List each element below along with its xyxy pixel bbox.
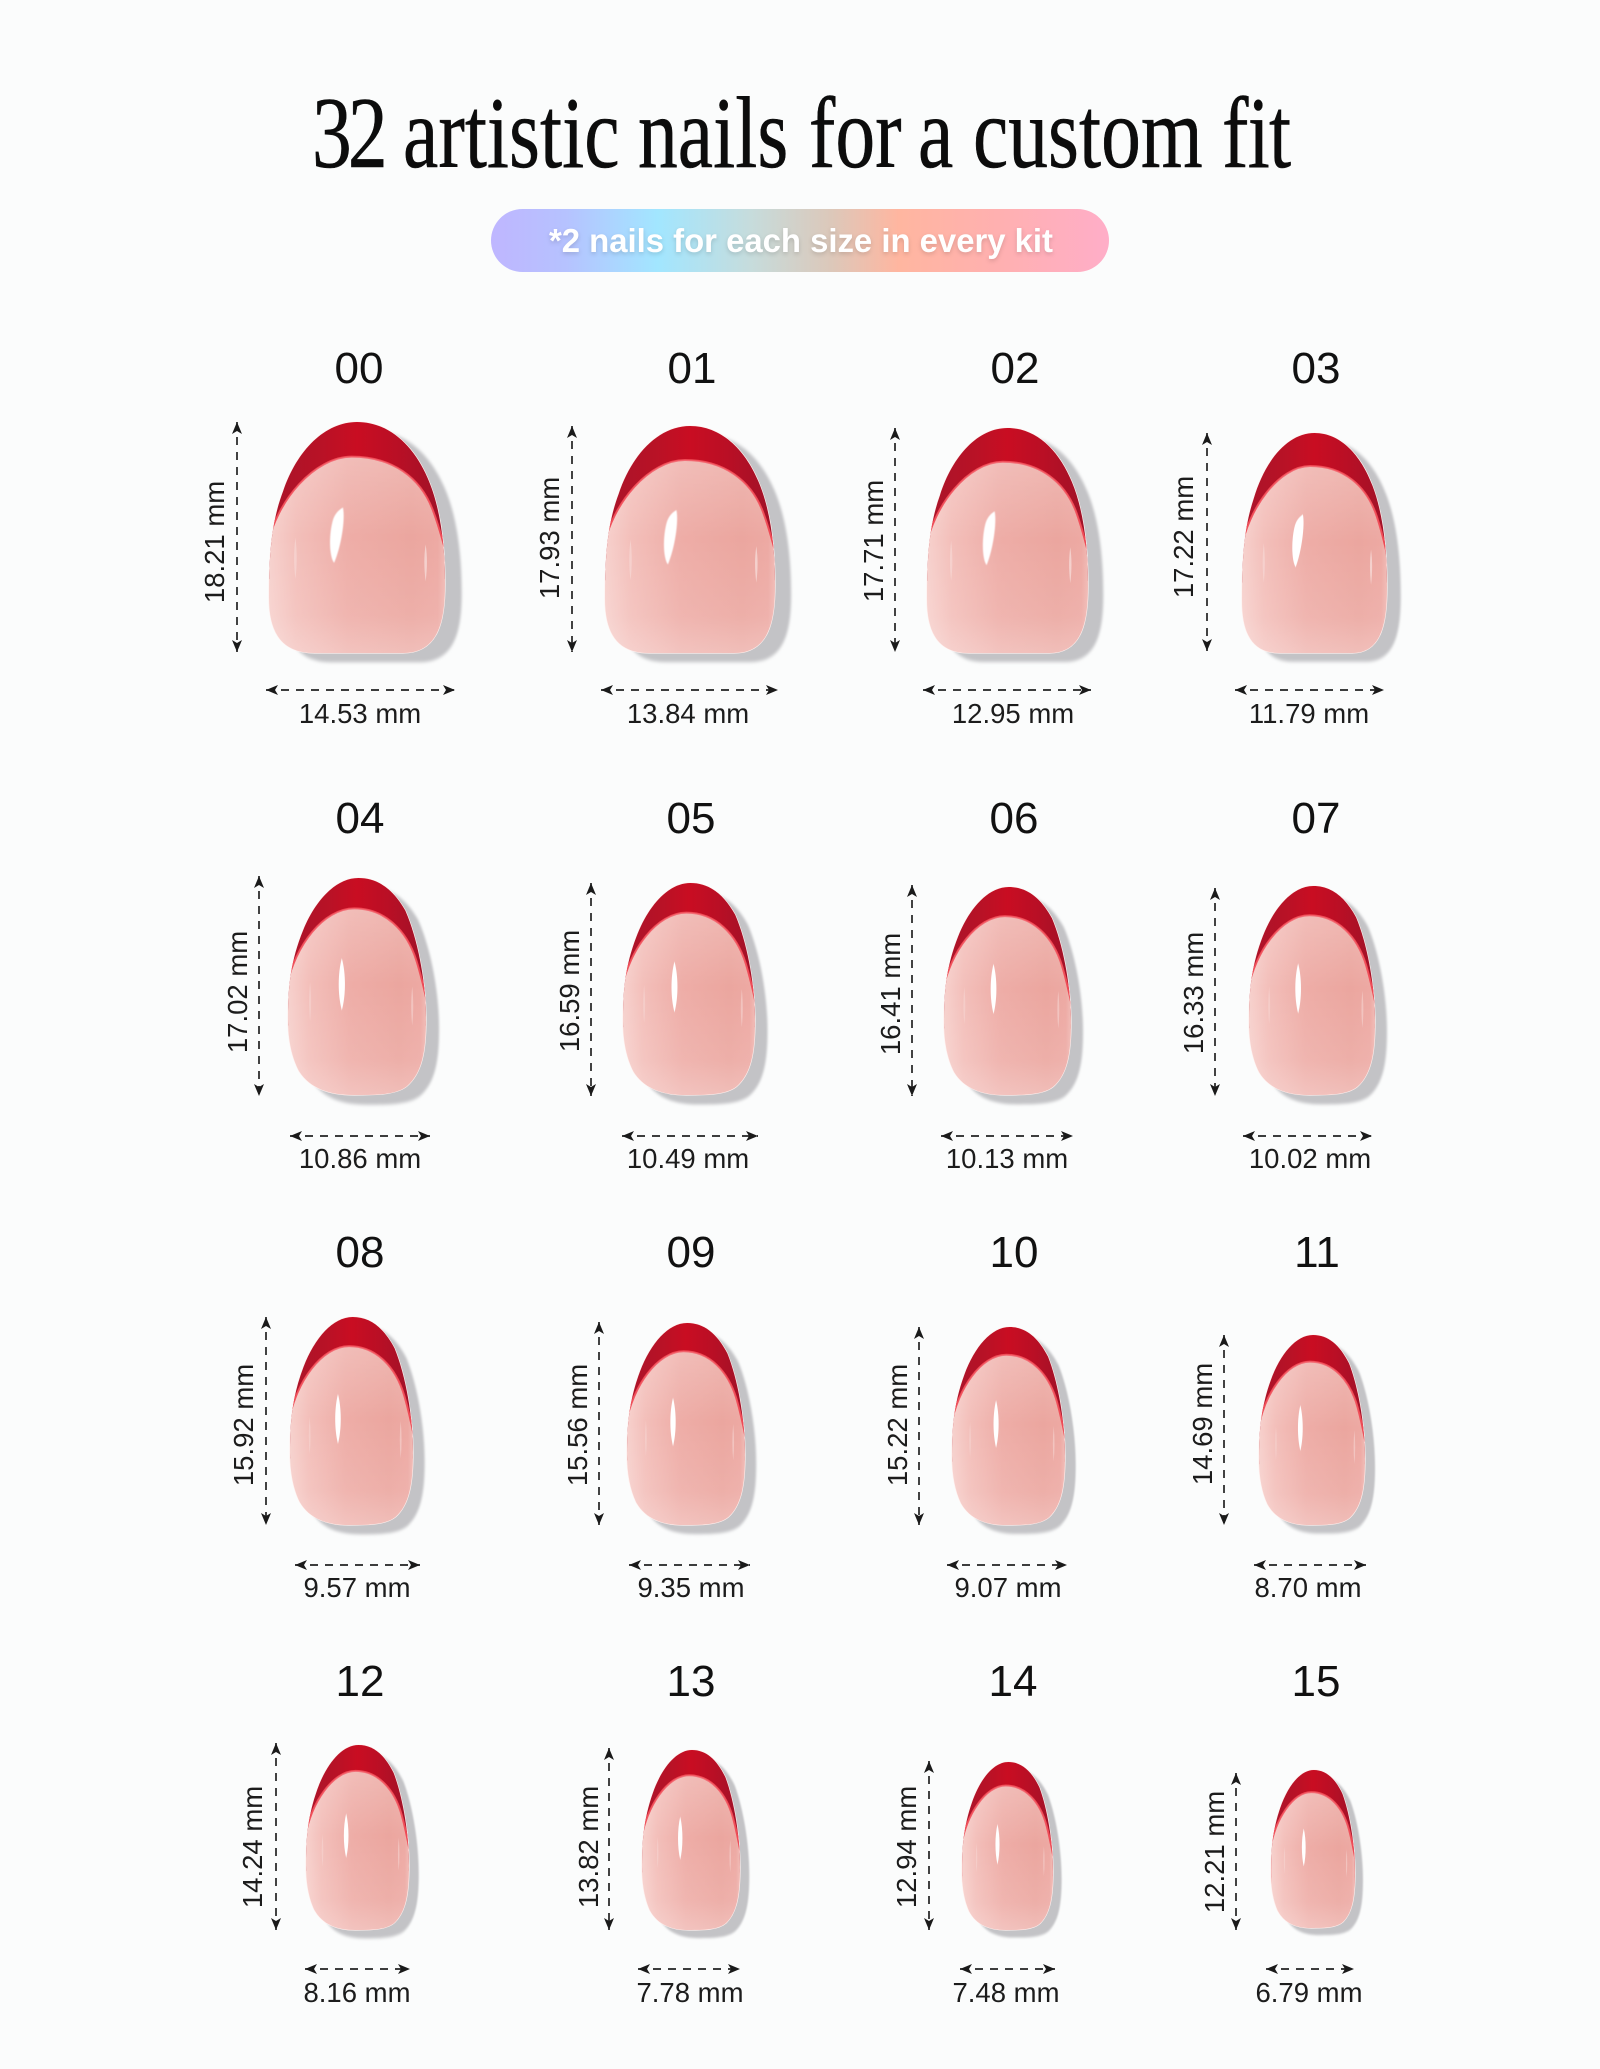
width arrow 08 bbox=[295, 1564, 420, 1566]
width label 14: 7.48 mm bbox=[953, 1977, 1059, 2008]
width label 05: 10.49 mm bbox=[627, 1143, 749, 1174]
width label 13: 7.78 mm bbox=[637, 1977, 743, 2008]
width arrow 02 bbox=[923, 689, 1091, 691]
width arrow 12 bbox=[305, 1968, 410, 1970]
size 09 bbox=[562, 1228, 756, 1603]
height arrow 10 bbox=[918, 1327, 920, 1525]
height arrow 12 bbox=[275, 1743, 277, 1930]
height arrow 02 bbox=[894, 428, 896, 652]
width arrow 00 bbox=[266, 689, 455, 691]
number 12: 12 bbox=[336, 1657, 384, 1706]
width arrow 07 bbox=[1243, 1135, 1372, 1137]
number 11: 11 bbox=[1294, 1228, 1340, 1277]
number 01: 01 bbox=[668, 344, 716, 393]
width arrow 01 bbox=[601, 689, 778, 691]
number 08: 08 bbox=[336, 1228, 384, 1277]
subtitle pill bbox=[491, 209, 1109, 272]
height label 02: 17.71 mm bbox=[858, 480, 889, 602]
height label 15: 12.21 mm bbox=[1199, 1791, 1230, 1913]
title: custom bbox=[973, 76, 1223, 189]
height arrow 06 bbox=[911, 885, 913, 1096]
width label 08: 9.57 mm bbox=[304, 1572, 410, 1603]
height arrow 11 bbox=[1223, 1335, 1225, 1525]
nail 15 bbox=[1269, 1767, 1363, 1935]
width arrow 13 bbox=[638, 1968, 740, 1970]
nail 07 bbox=[1246, 882, 1387, 1104]
nail 10 bbox=[950, 1323, 1076, 1534]
size 13 bbox=[573, 1657, 749, 2008]
width label 10: 9.07 mm bbox=[955, 1572, 1061, 1603]
number 15: 15 bbox=[1292, 1657, 1340, 1706]
width arrow 03 bbox=[1235, 689, 1384, 691]
width label 11: 8.70 mm bbox=[1255, 1572, 1361, 1603]
title: a bbox=[918, 76, 973, 189]
nail 03 bbox=[1239, 429, 1401, 662]
number 14: 14 bbox=[989, 1657, 1037, 1706]
size 04 bbox=[222, 794, 439, 1174]
number 05: 05 bbox=[667, 794, 715, 843]
size 01 bbox=[534, 344, 791, 729]
size 08 bbox=[228, 1228, 425, 1603]
nail 04 bbox=[285, 874, 439, 1105]
height label 04: 17.02 mm bbox=[222, 931, 253, 1053]
nail 02 bbox=[924, 424, 1103, 662]
subtitle pill: *2 nails for each size in every kit bbox=[549, 222, 1053, 259]
nail 13 bbox=[640, 1746, 749, 1938]
height arrow 00 bbox=[236, 422, 238, 652]
size 15 bbox=[1199, 1657, 1363, 2008]
title: 32 bbox=[312, 76, 400, 189]
title: fit bbox=[1222, 76, 1291, 189]
height arrow 05 bbox=[590, 883, 592, 1096]
width arrow 06 bbox=[941, 1135, 1073, 1137]
width label 02: 12.95 mm bbox=[952, 698, 1074, 729]
width label 01: 13.84 mm bbox=[627, 698, 749, 729]
width label 12: 8.16 mm bbox=[304, 1977, 410, 2008]
width label 07: 10.02 mm bbox=[1249, 1143, 1371, 1174]
width arrow 04 bbox=[290, 1135, 430, 1137]
height label 01: 17.93 mm bbox=[534, 477, 565, 599]
height arrow 14 bbox=[928, 1761, 930, 1930]
nail 00 bbox=[265, 417, 462, 662]
nail 12 bbox=[304, 1741, 419, 1938]
height arrow 09 bbox=[598, 1322, 600, 1525]
height arrow 01 bbox=[571, 426, 573, 652]
nail 14 bbox=[960, 1759, 1062, 1938]
height label 00: 18.21 mm bbox=[199, 481, 230, 603]
number 06: 06 bbox=[990, 794, 1038, 843]
nail 05 bbox=[620, 879, 768, 1105]
height label 05: 16.59 mm bbox=[554, 930, 585, 1052]
height label 08: 15.92 mm bbox=[228, 1364, 259, 1486]
nail 11 bbox=[1257, 1331, 1375, 1534]
nail 06 bbox=[941, 883, 1083, 1104]
width label 09: 9.35 mm bbox=[638, 1572, 744, 1603]
nail 01 bbox=[602, 421, 791, 662]
height label 07: 16.33 mm bbox=[1178, 932, 1209, 1054]
size 12 bbox=[237, 1657, 419, 2008]
number 07: 07 bbox=[1292, 794, 1340, 843]
number 02: 02 bbox=[991, 344, 1039, 393]
height label 09: 15.56 mm bbox=[562, 1364, 593, 1486]
size 02 bbox=[858, 344, 1103, 729]
size 14 bbox=[891, 1657, 1062, 2008]
number 13: 13 bbox=[667, 1657, 715, 1706]
nail 09 bbox=[625, 1319, 756, 1534]
height label 11: 14.69 mm bbox=[1187, 1363, 1218, 1485]
height label 03: 17.22 mm bbox=[1168, 476, 1199, 598]
size 00 bbox=[199, 344, 462, 729]
size 10 bbox=[882, 1228, 1076, 1603]
title: nails bbox=[638, 76, 808, 189]
height arrow 03 bbox=[1206, 433, 1208, 651]
width label 06: 10.13 mm bbox=[946, 1143, 1068, 1174]
height label 14: 12.94 mm bbox=[891, 1786, 922, 1908]
width arrow 15 bbox=[1266, 1968, 1354, 1970]
height arrow 15 bbox=[1235, 1773, 1237, 1930]
height arrow 07 bbox=[1214, 888, 1216, 1096]
width label 03: 11.79 mm bbox=[1249, 698, 1369, 729]
width label 15: 6.79 mm bbox=[1256, 1977, 1362, 2008]
height label 13: 13.82 mm bbox=[573, 1786, 604, 1908]
height arrow 04 bbox=[258, 876, 260, 1096]
width label 00: 14.53 mm bbox=[299, 698, 421, 729]
width arrow 14 bbox=[960, 1968, 1055, 1970]
width label 04: 10.86 mm bbox=[299, 1143, 421, 1174]
title: artistic bbox=[403, 76, 639, 189]
width arrow 05 bbox=[622, 1135, 758, 1137]
number 10: 10 bbox=[990, 1228, 1038, 1277]
width arrow 10 bbox=[947, 1564, 1067, 1566]
size 06 bbox=[875, 794, 1083, 1174]
number 00: 00 bbox=[335, 344, 383, 393]
height label 12: 14.24 mm bbox=[237, 1786, 268, 1908]
title: for bbox=[809, 76, 922, 189]
height label 06: 16.41 mm bbox=[875, 933, 906, 1055]
width arrow 11 bbox=[1254, 1564, 1366, 1566]
size 03 bbox=[1168, 344, 1401, 729]
height arrow 13 bbox=[608, 1748, 610, 1930]
height arrow 08 bbox=[265, 1317, 267, 1525]
size 05 bbox=[554, 794, 768, 1174]
number 03: 03 bbox=[1292, 344, 1340, 393]
size 07 bbox=[1178, 794, 1387, 1174]
number 04: 04 bbox=[336, 794, 384, 843]
width arrow 09 bbox=[629, 1564, 750, 1566]
number 09: 09 bbox=[667, 1228, 715, 1277]
size 11 bbox=[1187, 1228, 1375, 1603]
nail 08 bbox=[288, 1313, 425, 1534]
height label 10: 15.22 mm bbox=[882, 1364, 913, 1486]
